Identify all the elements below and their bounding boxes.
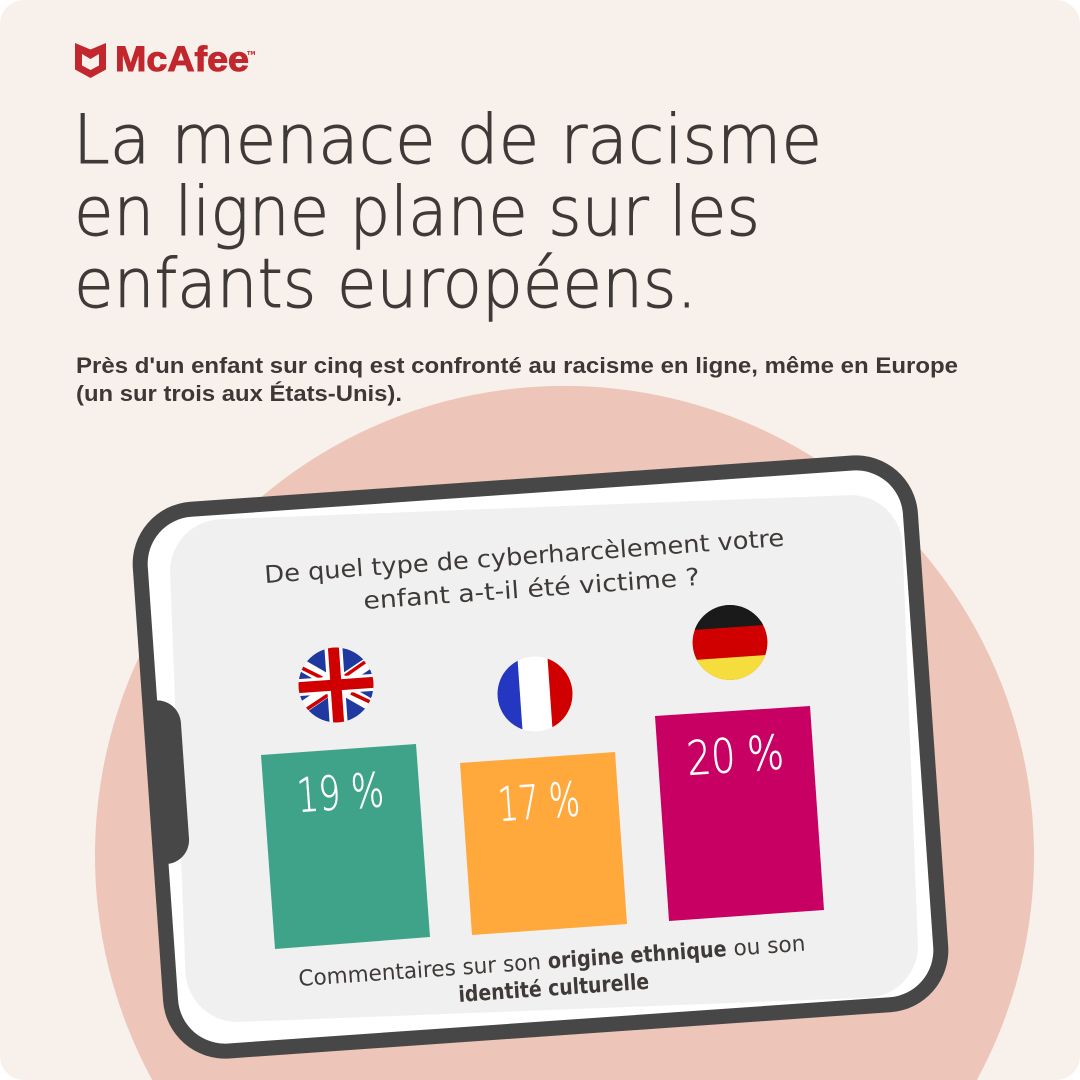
tablet side button	[146, 699, 191, 865]
subtitle: Près d'un enfant sur cinq est confronté au racisme en ligne, même en Europe	[76, 353, 958, 378]
logo: McAfee	[75, 40, 255, 79]
question text: enfant a-t-il été victime ?	[362, 563, 701, 615]
title: enfants européens.	[74, 245, 697, 324]
tablet screen bezel	[145, 467, 936, 1047]
trademark: TM	[247, 51, 255, 57]
bar: France 17%: 17 %	[496, 772, 582, 833]
bar: UK 19%: 19 %	[295, 763, 386, 824]
flag: France	[498, 656, 572, 732]
subtitle: (un sur trois aux États-Unis).	[76, 381, 402, 406]
bar: UK 19%	[261, 744, 430, 949]
tablet frame	[128, 451, 953, 1063]
bar: France 17%	[460, 752, 627, 935]
bar chart	[261, 706, 824, 949]
chart caption	[298, 932, 806, 1008]
chart caption: origine ethnique	[547, 937, 727, 975]
chart caption: Commentaires sur son	[298, 950, 542, 992]
question text	[263, 524, 785, 615]
flag: Germany	[692, 605, 768, 680]
tablet screen panel	[168, 493, 920, 1024]
flag: United Kingdom	[298, 648, 374, 722]
chart caption: ou son	[733, 932, 806, 962]
tablet body	[128, 451, 953, 1063]
bar: Germany 20%	[655, 706, 824, 921]
chart caption: identité culturelle	[458, 970, 650, 1008]
subtitle	[76, 353, 958, 406]
bar: Germany 20%: 20 %	[685, 725, 786, 787]
title: en ligne plane sur les	[74, 173, 760, 252]
logo wordmark: McAfee	[115, 40, 249, 79]
decorative circle	[95, 386, 1034, 1080]
title: La menace de racisme	[73, 101, 822, 180]
question text: De quel type de cyberharcèlement votre	[263, 524, 785, 589]
icon: shield	[75, 43, 106, 78]
title	[73, 101, 822, 324]
